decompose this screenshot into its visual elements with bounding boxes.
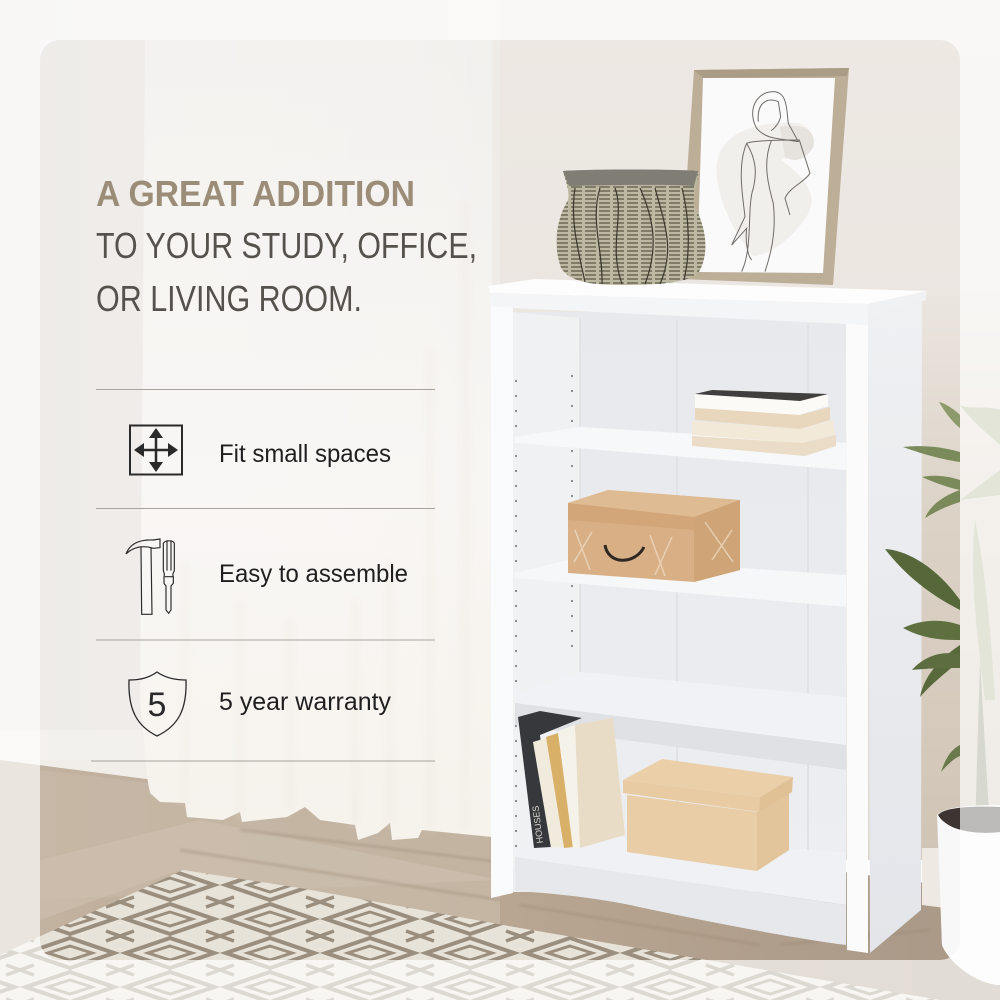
top board [488, 279, 927, 304]
feature: fit small spaces: Fit small spaces [219, 440, 391, 468]
houseplant leaves [885, 402, 1000, 830]
framed line art print [680, 68, 849, 285]
heading: OR LIVING ROOM. [96, 278, 362, 319]
feature list [91, 390, 435, 761]
shelf 1 [515, 427, 846, 470]
woven wooden box [568, 490, 740, 582]
feature: easy to assemble [126, 539, 408, 614]
feature: 5 year warranty [129, 672, 391, 736]
shadow under shelf 3 [515, 703, 846, 770]
shelf 2 [515, 557, 846, 607]
side panel [868, 296, 922, 953]
heading [96, 173, 477, 319]
white plant pot [937, 805, 1000, 985]
curtain [140, 40, 492, 840]
patterned rug [0, 870, 940, 1000]
heading: A GREAT ADDITION [96, 173, 415, 214]
feature: easy to assemble: Easy to assemble [219, 560, 408, 588]
back panel [512, 312, 846, 892]
icon: shield with 5 [129, 672, 186, 736]
books on bottom shelf: HOUSES [530, 805, 545, 844]
stacked books on shelf [692, 390, 836, 456]
kraft storage box [623, 759, 793, 871]
shelf peg holes [516, 375, 572, 860]
books on bottom shelf [518, 711, 625, 849]
feature: 5 year warranty: 5 year warranty [219, 688, 391, 716]
bottom shelf and apron [515, 835, 846, 905]
right front panel [846, 322, 868, 953]
shelf 3 [515, 672, 846, 745]
icon: move arrows in square [130, 426, 182, 474]
ceramic vase [557, 170, 705, 285]
icon: hammer and screwdriver [126, 539, 174, 614]
soft white panel behind text [40, 40, 490, 760]
feature: fit small spaces [130, 426, 391, 474]
icon: shield with 5: 5 [148, 686, 166, 724]
heading: TO YOUR STUDY, OFFICE, [96, 225, 477, 266]
bookcase [488, 279, 927, 953]
inner left wall [512, 312, 580, 870]
left front panel [491, 296, 513, 898]
